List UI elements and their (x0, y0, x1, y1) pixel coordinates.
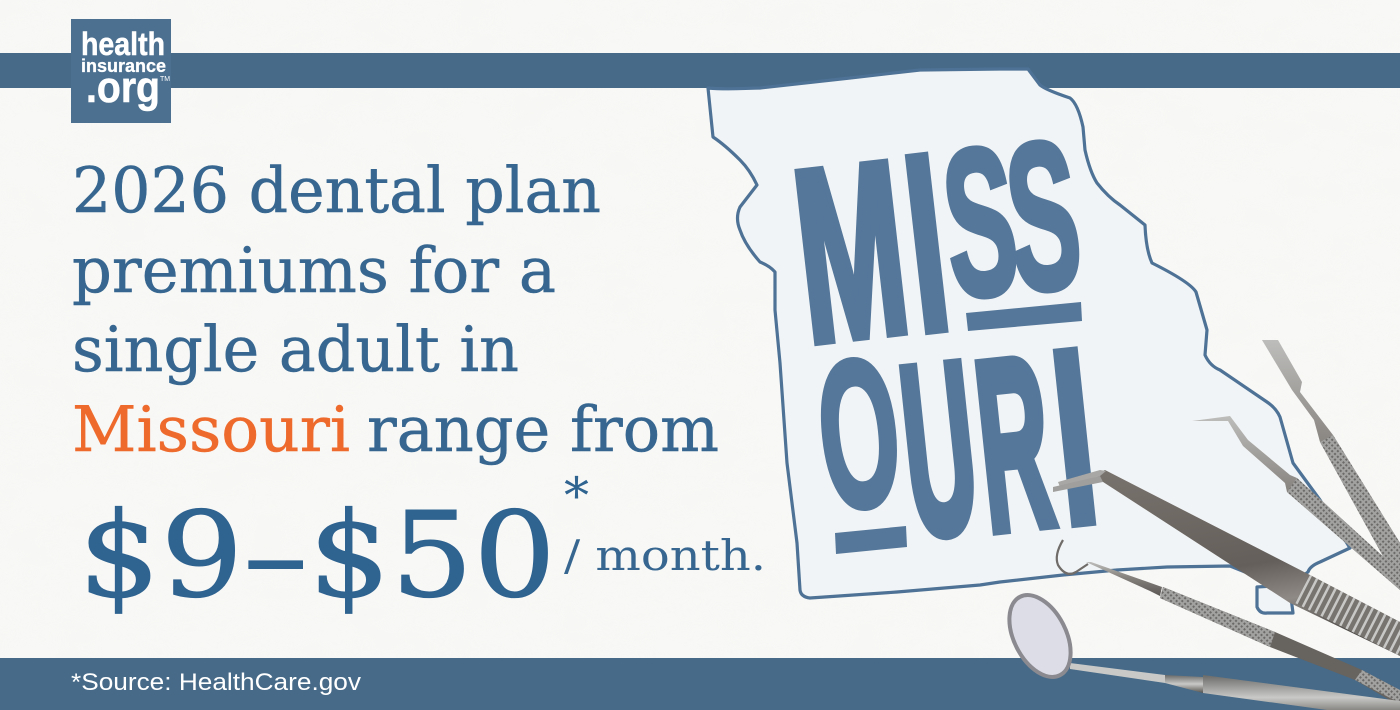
OURI underline (835, 526, 907, 554)
top band (0, 53, 1400, 88)
MISS underline (966, 302, 1082, 331)
headline: 2026 dental plan (72, 154, 601, 227)
tool: spatula (1262, 340, 1400, 587)
logo: TM (160, 76, 170, 83)
source note: *Source: HealthCare.gov (71, 669, 361, 696)
logo: .org (86, 63, 160, 112)
price range: $9–$50 (78, 486, 556, 624)
state name lettering: OURI (807, 300, 1106, 588)
headline: range from (367, 393, 719, 466)
per month label: / month. (564, 531, 766, 580)
Missouri state outline (708, 69, 1350, 613)
tool: hook explorer (1057, 540, 1400, 706)
tool: tweezers (1053, 470, 1400, 656)
bottom band (0, 658, 1400, 710)
dental tools (997, 340, 1400, 710)
headline: single adult in (72, 313, 519, 386)
headline: premiums for a (72, 234, 556, 307)
state name lettering: MISS: S (996, 97, 1090, 337)
tool: dental mirror (997, 585, 1400, 710)
state name lettering: OURI: U (890, 312, 989, 588)
headline (72, 154, 719, 466)
state name lettering: OURI: R (965, 307, 1064, 583)
asterisk: * (564, 467, 589, 525)
tool: curved probe (1192, 416, 1400, 590)
state name lettering: MISS: M (783, 111, 919, 394)
state name lettering: MISS: I (895, 105, 958, 381)
headline: Missouri (72, 393, 350, 466)
state name lettering: OURI: I (1043, 300, 1106, 573)
state name lettering: OURI: O (807, 313, 911, 556)
logo (71, 19, 171, 123)
state name lettering: MISS: S (933, 103, 1027, 343)
logo: health (81, 26, 165, 62)
state name lettering: MISS (783, 97, 1090, 394)
logo: insurance (81, 56, 166, 76)
